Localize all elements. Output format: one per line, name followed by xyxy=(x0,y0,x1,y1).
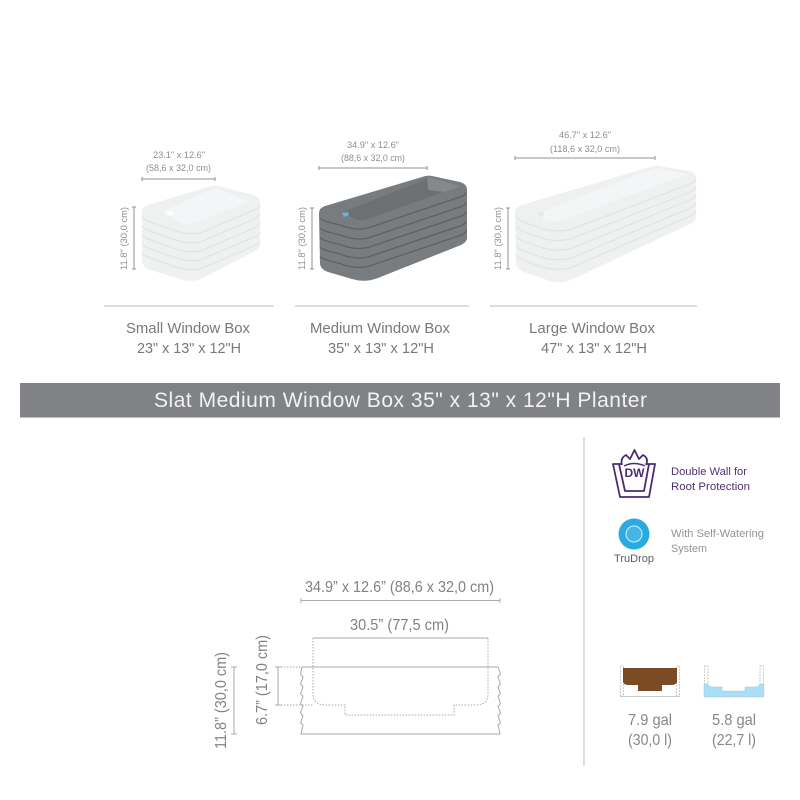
inner depth dimension: 6.7” (17,0 cm) xyxy=(254,635,271,725)
planter: medium grey xyxy=(319,176,467,281)
dimension: medium height: 11.8" (30,0 cm) xyxy=(297,207,307,270)
dimension: medium width xyxy=(319,140,427,170)
feature: self-watering xyxy=(614,518,764,565)
dimension: large width: (118,6 x 32,0 cm) xyxy=(550,144,620,154)
divider and label: small: 23" x 13" x 12"H xyxy=(137,341,241,357)
divider and label: large: 47" x 13" x 12"H xyxy=(541,341,647,357)
text: water volume: (22,7 l) xyxy=(712,732,756,749)
text: double wall: Root Protection xyxy=(671,481,750,493)
divider and label: large: Large Window Box xyxy=(529,321,656,337)
dimension: small height: 11.8" (30,0 cm) xyxy=(119,207,129,270)
volume: soil xyxy=(620,666,680,749)
volume: water xyxy=(704,666,764,749)
overall height dimension: 11.8” (30,0 cm) xyxy=(213,652,230,749)
dimension: medium width: (88,6 x 32,0 cm) xyxy=(341,153,405,163)
vertical divider xyxy=(583,437,585,766)
feature: double wall xyxy=(613,450,750,497)
divider and label: small: Small Window Box xyxy=(126,321,251,337)
icon: soil fill xyxy=(620,666,680,696)
planter: large white xyxy=(515,166,696,282)
text: water volume: 5.8 gal xyxy=(712,712,756,729)
dimension: small width: (58,6 x 32,0 cm) xyxy=(146,163,211,173)
inner depth dimension xyxy=(254,635,281,725)
panel: small window box xyxy=(104,150,274,357)
text: soil volume: (30,0 l) xyxy=(628,732,672,749)
inner width dimension: 30.5” (77,5 cm) xyxy=(350,617,449,634)
planter profile xyxy=(278,638,500,734)
divider and label: medium xyxy=(295,306,469,357)
cross-section diagram xyxy=(213,579,500,749)
dimension: medium height xyxy=(297,207,314,270)
panel: medium window box xyxy=(295,140,469,357)
text: self-watering: System xyxy=(671,543,707,555)
icon: water fill xyxy=(704,666,764,697)
dimension: large height xyxy=(493,207,510,270)
dimension: small width xyxy=(142,150,215,181)
overall width dimension: 34.9” x 12.6” (88,6 x 32,0 cm) xyxy=(305,579,494,596)
divider and label: medium: Medium Window Box xyxy=(310,321,451,337)
divider and label: medium: 35" x 13" x 12"H xyxy=(328,341,434,357)
overall height dimension xyxy=(213,652,237,749)
icon: TruDrop: TruDrop xyxy=(614,553,654,565)
dimension: small height xyxy=(119,207,136,270)
title banner: Slat Medium Window Box 35" x 13" x 12"H Planter xyxy=(154,389,647,412)
icon: TruDrop xyxy=(614,518,654,565)
dimension: medium width: 34.9" x 12.6" xyxy=(347,140,399,150)
text: soil volume: 7.9 gal xyxy=(628,712,672,729)
icon: DW double wall: DW xyxy=(624,468,645,480)
text: self-watering: With Self-Watering xyxy=(671,528,764,540)
planter: small white xyxy=(142,186,260,281)
dimension: large width xyxy=(515,130,655,160)
panel: large window box xyxy=(490,130,697,357)
dimension: large height: 11.8" (30,0 cm) xyxy=(493,207,503,270)
title banner xyxy=(20,383,780,418)
text: double wall: Double Wall for xyxy=(671,466,747,478)
divider and label: small xyxy=(104,306,274,357)
overall width dimension xyxy=(301,579,500,603)
dimension: small width: 23.1" x 12.6" xyxy=(153,150,205,160)
divider and label: large xyxy=(490,306,697,357)
dimension: large width: 46.7" x 12.6" xyxy=(559,130,611,140)
